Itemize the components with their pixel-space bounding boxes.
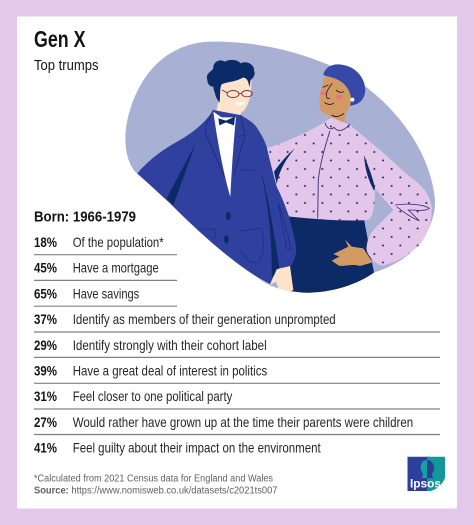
collar — [325, 123, 350, 130]
woman figure — [267, 64, 432, 293]
logo silhouette left half — [421, 460, 427, 478]
blouse fold shadows — [274, 148, 375, 191]
skirt — [287, 216, 374, 293]
statistics list — [34, 234, 413, 456]
row: 45%: Have a mortgage — [73, 260, 159, 276]
row: 31%: Feel closer to one political party — [73, 388, 232, 404]
man hair — [207, 60, 255, 103]
sleeve fold — [395, 204, 429, 221]
illustration: two Gen X figures on a blob — [125, 42, 435, 293]
shirt — [213, 112, 236, 197]
bridge — [222, 90, 242, 93]
jacket shadow — [167, 143, 279, 278]
row: 31% — [34, 388, 232, 404]
row: 45%: 45% — [34, 260, 57, 276]
earring — [350, 98, 354, 102]
man ear — [214, 88, 220, 96]
row: 37%: 37% — [34, 311, 57, 327]
man figure — [137, 60, 296, 292]
title: Gen X — [34, 26, 86, 52]
right lens — [242, 90, 252, 97]
row: 18% — [34, 234, 164, 250]
row: 37%: Identify as members of their generation unprompted — [73, 311, 336, 327]
icon: Ipsos logo — [408, 457, 445, 491]
logo blue block — [408, 457, 430, 491]
neck — [328, 108, 347, 125]
lower button — [224, 235, 229, 243]
blouse dots — [267, 117, 432, 265]
born heading: Born: 1966-1979 — [34, 210, 136, 226]
row: 65%: Have savings — [73, 285, 139, 301]
footnote: *Calculated from 2021 Census data for England and Wales — [34, 474, 273, 485]
blouse — [267, 117, 432, 265]
glasses — [222, 90, 252, 97]
man jacket — [137, 110, 296, 284]
row: 18%: 18% — [34, 234, 57, 250]
man face — [217, 77, 251, 114]
row: 65% — [34, 285, 139, 301]
subtitle: Top trumps — [34, 58, 98, 74]
bow tie — [218, 117, 235, 125]
facial lines — [323, 83, 344, 117]
background blob — [125, 42, 435, 293]
woman hand — [332, 239, 373, 266]
row: 18%: Of the population* — [73, 234, 164, 250]
row: 41%: 41% — [34, 440, 57, 456]
logo teal block — [427, 457, 445, 491]
smile — [235, 101, 245, 105]
man hand — [270, 266, 293, 292]
logo silhouette right half — [427, 460, 434, 478]
woman face — [319, 73, 354, 116]
source line: Source: https://www.nomisweb.co.uk/datasets/c2021ts007 — [34, 485, 278, 496]
row: 29%: 29% — [34, 337, 57, 353]
woman hair — [323, 64, 365, 106]
row: 27%: 27% — [34, 414, 57, 430]
row: 39%: 39% — [34, 362, 57, 378]
placket seam — [318, 131, 330, 218]
row: 41%: Feel guilty about their impact on the environment — [73, 440, 321, 456]
blush right — [336, 95, 343, 99]
row: 45% — [34, 260, 159, 276]
man neck — [215, 97, 243, 122]
logo wordmark: Ipsos — [410, 478, 441, 490]
row: 31%: 31% — [34, 388, 57, 404]
row: 65%: 65% — [34, 285, 57, 301]
lapels — [205, 110, 245, 177]
row: 39%: Have a great deal of interest in politics — [73, 362, 267, 378]
buttons — [226, 212, 231, 220]
left lens — [227, 90, 239, 97]
blush — [320, 91, 327, 95]
row: 29%: Identify strongly with their cohort label — [73, 337, 267, 353]
pockets — [202, 170, 291, 262]
pale sliver by the hand — [263, 270, 273, 287]
